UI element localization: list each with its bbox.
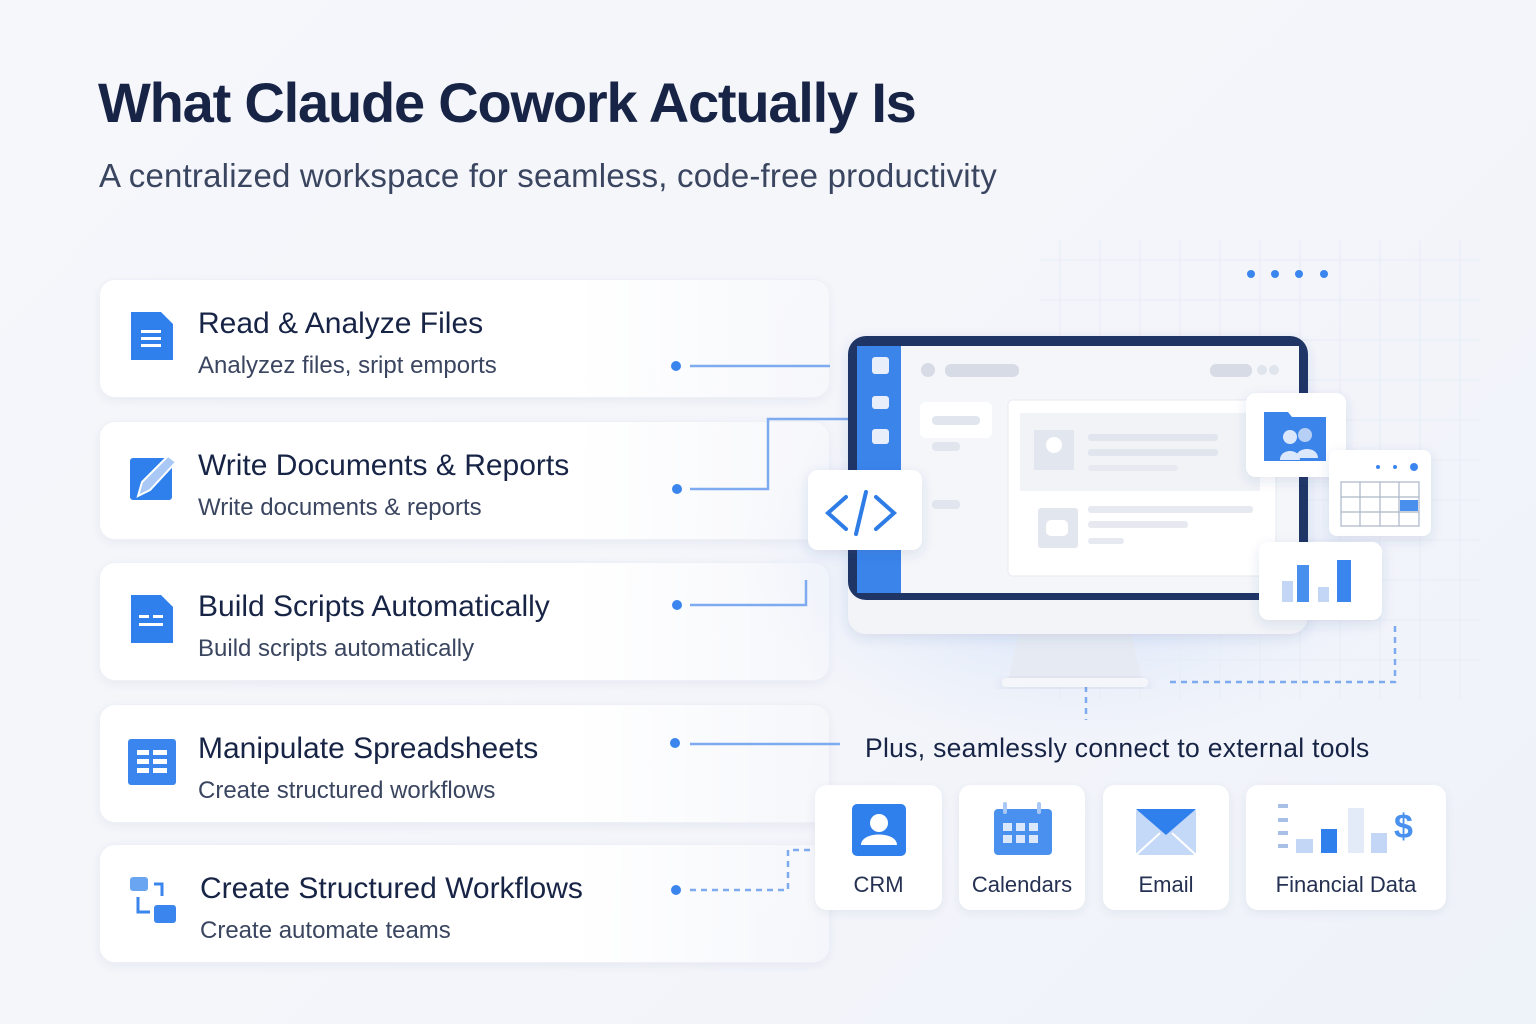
subtitle: A centralized workspace for seamless, code-free productivity [99, 157, 997, 194]
card: build scripts: Build Scripts Automatically [198, 590, 550, 623]
card: workflows: Create Structured Workflows [200, 872, 583, 905]
card: build scripts [99, 562, 829, 681]
card: workflows [99, 844, 829, 963]
icon: pen [130, 457, 174, 500]
card: write documents: Write Documents & Reports [198, 449, 569, 482]
icon: script doc [131, 595, 173, 643]
icon: team folder card [1246, 393, 1346, 477]
card: read files: Read & Analyze Files [198, 307, 483, 340]
tool: Email: Email [1138, 872, 1194, 897]
card: spreadsheets [99, 704, 829, 823]
dots [1247, 270, 1328, 278]
icon: bar chart card [1259, 542, 1382, 620]
card: build scripts: Build scripts automatically [198, 635, 474, 662]
icon: grid [128, 739, 176, 785]
tool: Financial Data [1246, 785, 1446, 910]
tool: CRM [815, 785, 942, 910]
icon: workflow [130, 877, 176, 923]
icon: document [131, 312, 173, 360]
card: read files [99, 279, 829, 398]
card: spreadsheets: Create structured workflows [198, 777, 495, 804]
tool: Calendars: Calendars [972, 872, 1072, 897]
card: write documents [99, 421, 829, 540]
icon: code card [808, 470, 922, 550]
tool: Email [1103, 785, 1229, 910]
icon: calendar card [1329, 450, 1431, 536]
card: read files: Analyzez files, sript emports [198, 352, 497, 379]
heading: external tools: Plus, seamlessly connect to external tools [865, 733, 1370, 763]
card: spreadsheets: Manipulate Spreadsheets [198, 732, 538, 765]
card: workflows: Create automate teams [200, 917, 451, 944]
tool: Financial Data: Financial Data [1276, 872, 1416, 897]
tool: Financial Data: $ [1394, 808, 1413, 846]
connectors [670, 361, 682, 895]
title: What Claude Cowork Actually Is [98, 71, 916, 134]
monitor [848, 336, 1308, 687]
card: write documents: Write documents & reports [198, 494, 482, 521]
tool: Calendars [959, 785, 1085, 910]
tool: CRM: CRM [853, 872, 904, 897]
